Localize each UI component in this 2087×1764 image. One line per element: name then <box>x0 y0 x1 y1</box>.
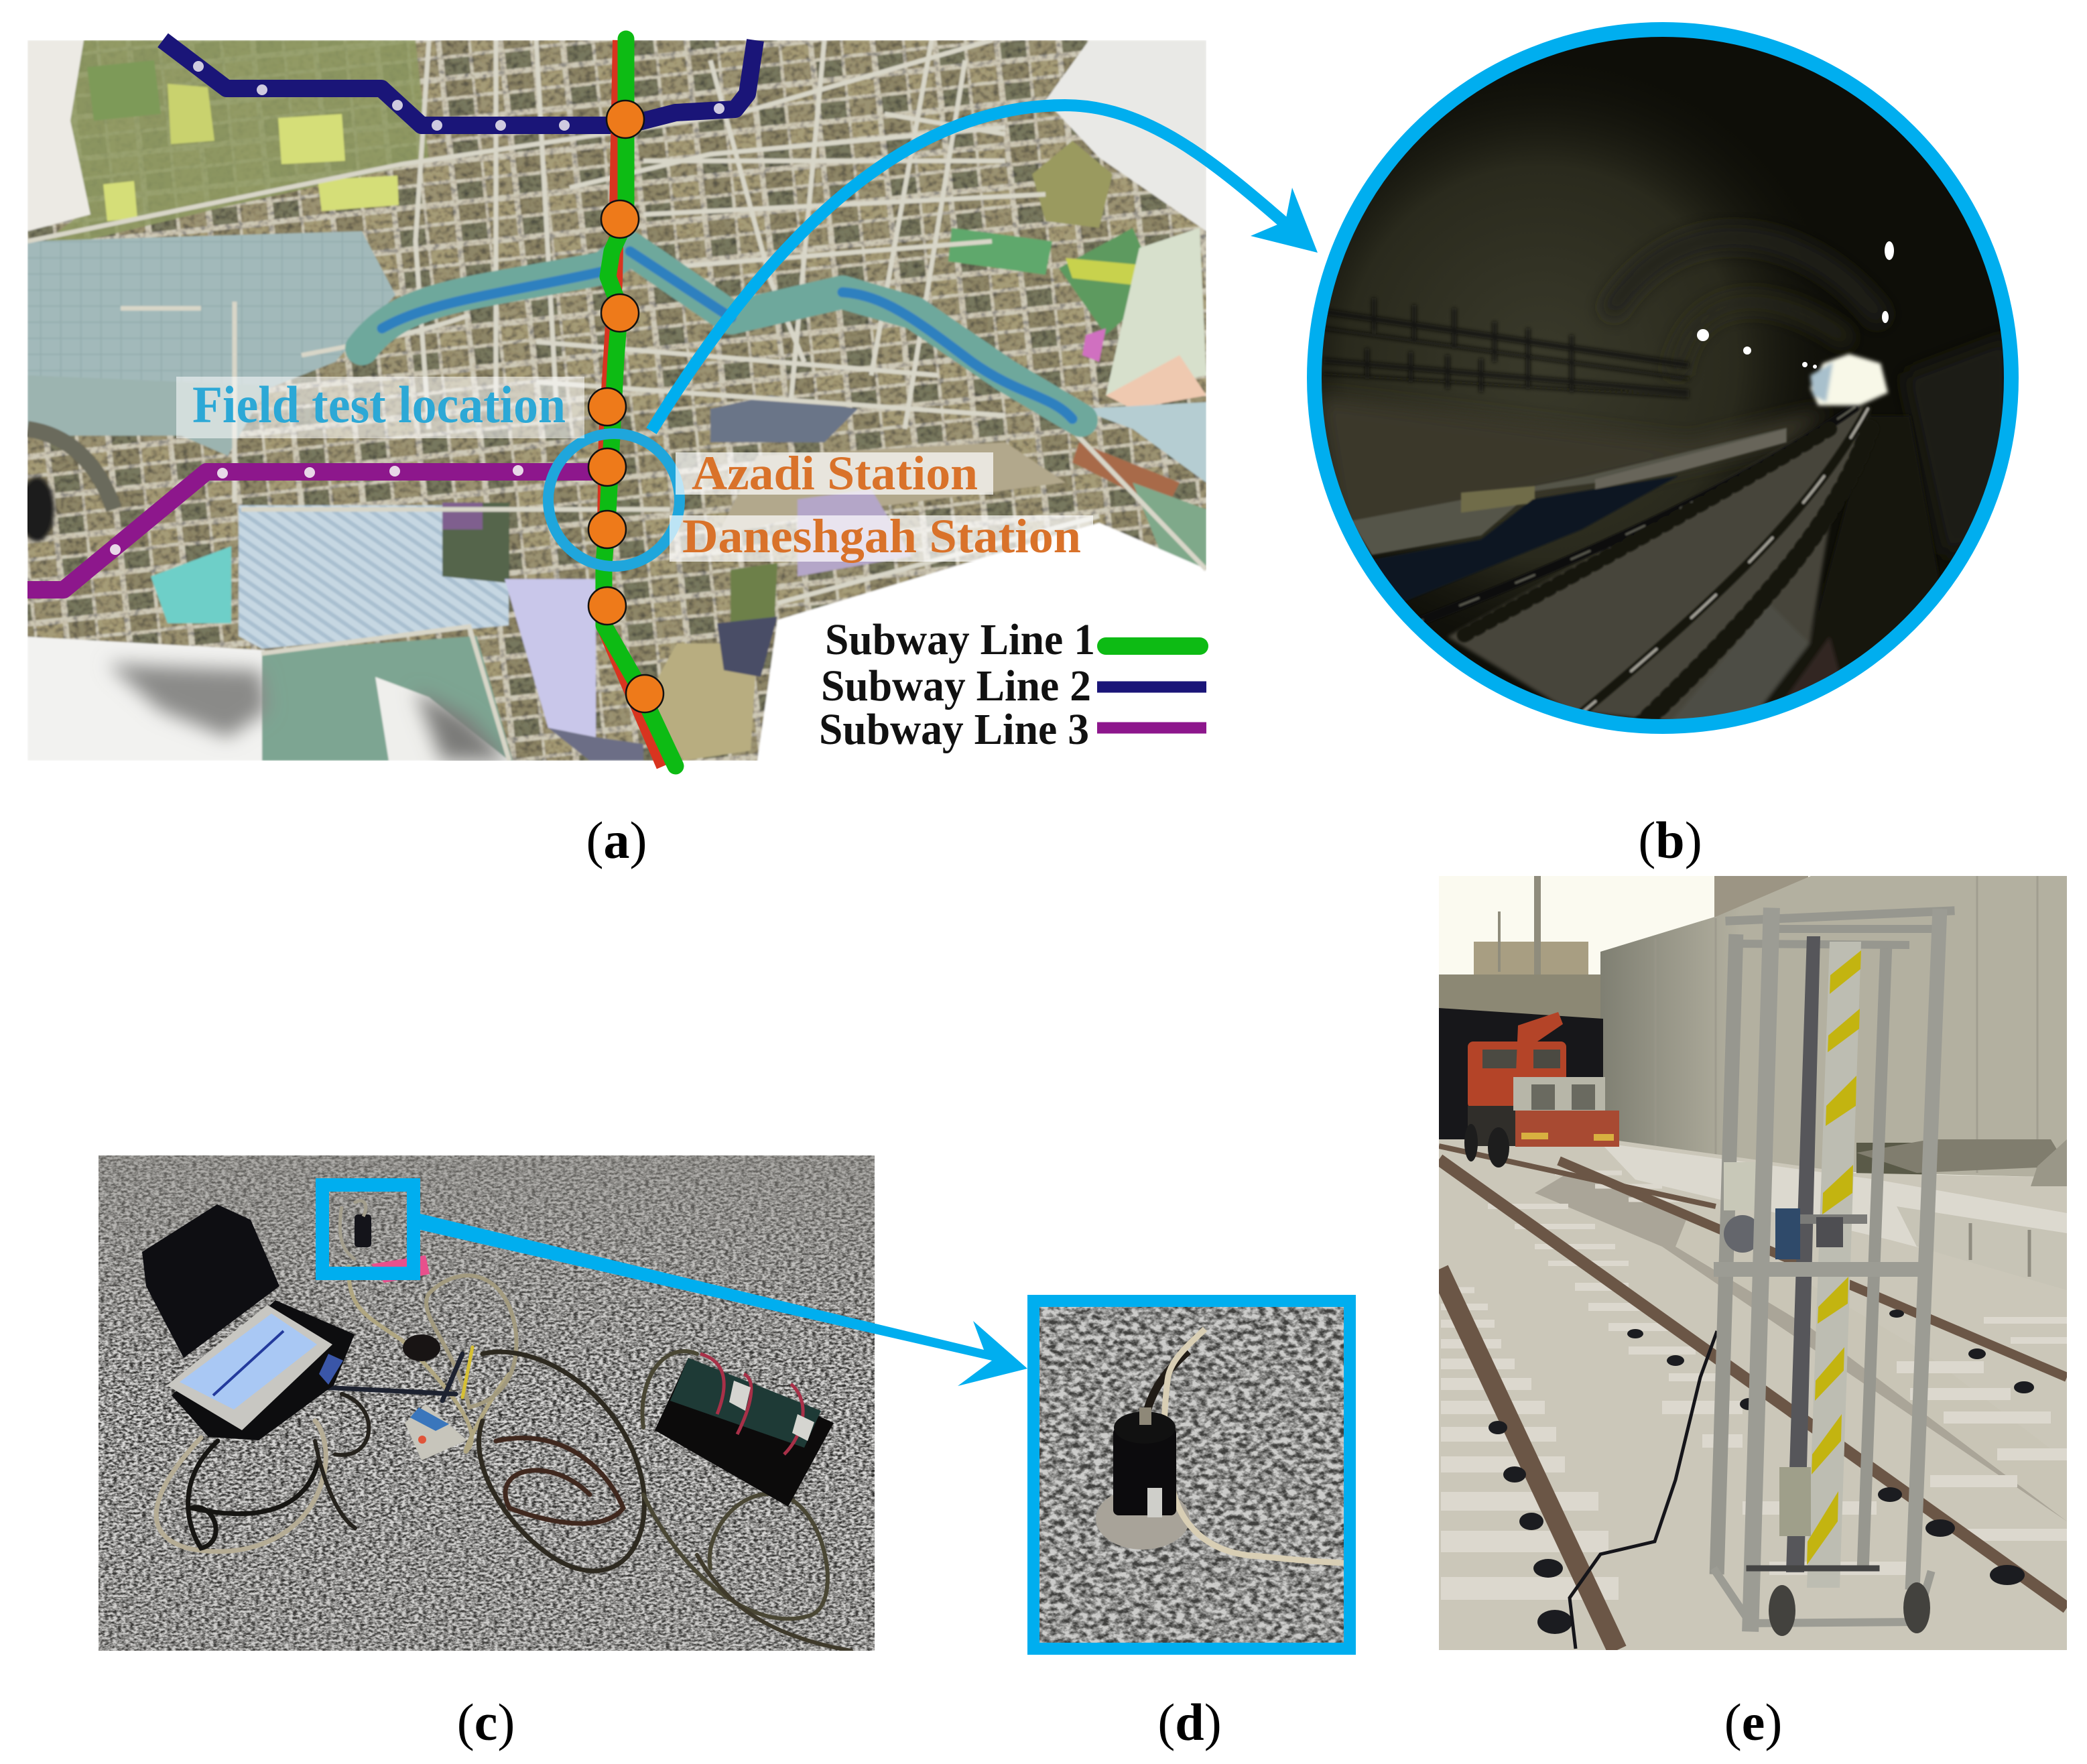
concrete wall <box>1600 876 2067 1183</box>
legend: Subway Line 2 <box>821 662 1091 710</box>
rail fasteners <box>1489 1310 2034 1634</box>
black cable <box>1570 1331 1717 1649</box>
truck <box>1464 1012 1619 1168</box>
platform edge <box>1600 1139 2067 1290</box>
black cable <box>1147 1351 1188 1413</box>
panel (e): impact rig photo <box>1439 876 2067 1650</box>
arrow from (c) to (d) <box>420 1214 1027 1386</box>
panel (d): sensor close-up photo <box>1033 1301 1350 1649</box>
subway line 1 <box>604 39 676 766</box>
tunnel wall <box>1322 111 2004 607</box>
pale cable <box>1164 1329 1344 1563</box>
concrete ledge <box>1351 428 1787 603</box>
tunnel lights <box>1697 241 1894 369</box>
cable brackets <box>1324 298 1689 397</box>
amplifier box <box>405 1404 467 1460</box>
map base <box>19 40 1206 761</box>
drop-weight frame <box>1716 911 1950 1636</box>
rails <box>1439 1146 2067 1650</box>
caption (e): (e) <box>1724 1693 1782 1751</box>
caption (d): (d) <box>1157 1693 1222 1751</box>
overpass and tunnel mouth <box>1439 974 1603 1139</box>
raised slab <box>1535 1173 2067 1521</box>
pink tag <box>371 1255 430 1283</box>
label: Daneshgah station: Daneshgah Station <box>682 509 1081 563</box>
caption (c): (c) <box>457 1693 515 1751</box>
front frame <box>1716 916 1940 1623</box>
small sensor in (c) <box>340 1201 371 1260</box>
subway line 3 <box>27 465 604 590</box>
data logger case <box>142 1204 355 1440</box>
caption (a): (a) <box>586 811 647 869</box>
river <box>362 248 1081 420</box>
label: field test location: Field test location <box>192 375 566 434</box>
panel (a): subway map <box>19 39 1206 766</box>
base plate <box>1096 1488 1190 1550</box>
tunnel exit light <box>1810 354 1888 405</box>
subway line 2 <box>163 40 755 131</box>
wheels <box>1769 1582 1930 1636</box>
drop weight <box>1779 1467 1811 1536</box>
sleepers <box>1441 1173 2067 1588</box>
panel (b): tunnel photo <box>1314 29 2011 731</box>
ground <box>1439 1139 2067 1650</box>
legend: Subway Line 1 <box>825 615 1095 664</box>
background building <box>1474 876 1808 982</box>
test location ring <box>548 434 680 566</box>
caption (b): (b) <box>1638 811 1702 869</box>
curved arrow from map to tunnel <box>651 105 1318 431</box>
wires <box>156 1267 851 1651</box>
label: Azadi station: Azadi Station <box>692 446 978 500</box>
red track line <box>603 40 663 766</box>
rails <box>1414 407 1870 731</box>
legend <box>819 615 1206 754</box>
battery pack <box>655 1354 834 1507</box>
legend: Subway Line 3 <box>819 705 1089 754</box>
selection box on sensor <box>322 1185 414 1273</box>
motor assembly <box>1724 1162 1867 1259</box>
stations <box>588 101 663 712</box>
small black unit <box>403 1334 440 1361</box>
panel (c): measurement equipment photo <box>99 1155 875 1651</box>
geophone sensor <box>1113 1407 1176 1517</box>
central striped post <box>1786 936 1861 1588</box>
track floor <box>1448 407 1944 731</box>
